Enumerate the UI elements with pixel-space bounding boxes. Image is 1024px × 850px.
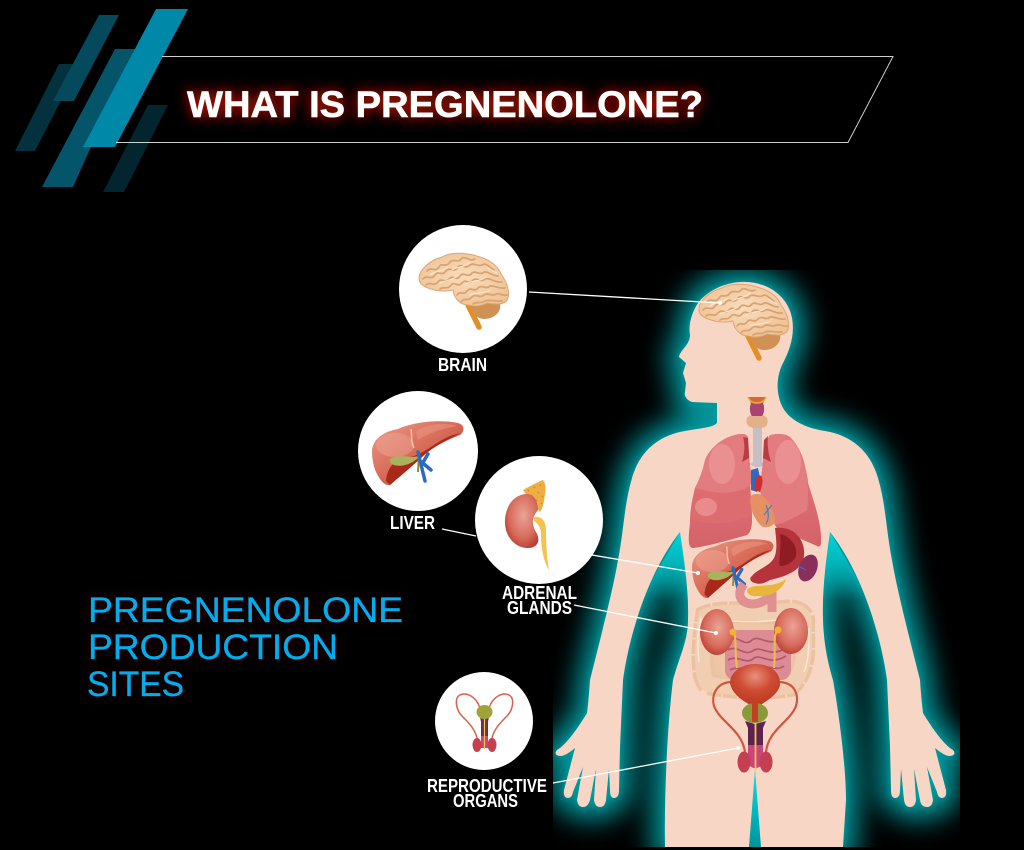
organ: liver in body	[692, 539, 773, 598]
label: liver: LIVER	[390, 513, 435, 533]
circle: brain	[399, 225, 527, 353]
circle: adrenal gland	[475, 456, 603, 584]
label: adrenal glands: ADRENAL	[502, 583, 577, 603]
organ: kidneys and ureters	[700, 608, 808, 668]
organ: heart	[750, 468, 775, 527]
section heading: production sites: PRODUCTION	[88, 628, 338, 667]
organ: lungs	[689, 434, 821, 548]
organ: bladder and reproductive system	[713, 664, 797, 772]
connector: adrenal glands	[574, 605, 718, 635]
body silhouette with teal glow	[556, 282, 954, 847]
section heading: production sites: SITES	[87, 665, 184, 704]
label: adrenal glands: GLANDS	[507, 598, 572, 618]
label: reproductive organs	[427, 776, 547, 811]
organ: stomach	[750, 528, 804, 584]
icon: brain	[419, 253, 509, 327]
title: WHAT IS PREGNENOLONE?	[187, 84, 703, 125]
organ: large intestine	[698, 611, 809, 689]
section heading: production sites: PREGNENOLONE	[88, 591, 403, 630]
icon: liver	[372, 421, 464, 485]
body glow	[556, 282, 954, 847]
section heading: production sites: PRODUCTION	[88, 628, 338, 667]
icon: kidney with adrenal gland	[505, 480, 549, 570]
section heading: production sites: SITES	[87, 665, 184, 704]
label: reproductive organs: ORGANS	[453, 791, 518, 811]
connector: reproductive organs	[553, 746, 740, 783]
organ: spleen	[794, 552, 822, 584]
organ: duodenum and pancreas	[740, 579, 786, 612]
header decoration: slanted stripes	[15, 9, 188, 192]
label: reproductive organs: REPRODUCTIVE	[427, 776, 547, 796]
organ: small intestine	[725, 630, 791, 680]
title: WHAT IS PREGNENOLONE?	[187, 84, 703, 125]
icon: reproductive organs	[456, 694, 513, 752]
organ: thyroid and trachea	[746, 397, 768, 467]
organ: brain in body	[699, 284, 789, 358]
circle: liver	[358, 391, 478, 511]
connector: brain	[529, 292, 722, 305]
body fill	[556, 282, 954, 847]
label: brain: BRAIN	[438, 355, 487, 375]
title banner outline	[116, 56, 893, 142]
circle: reproductive organs	[435, 672, 533, 770]
label: adrenal glands	[502, 583, 577, 618]
section heading: production sites: PREGNENOLONE	[88, 591, 403, 630]
connector: liver label to liver	[442, 529, 700, 575]
section heading: production sites	[87, 591, 403, 704]
